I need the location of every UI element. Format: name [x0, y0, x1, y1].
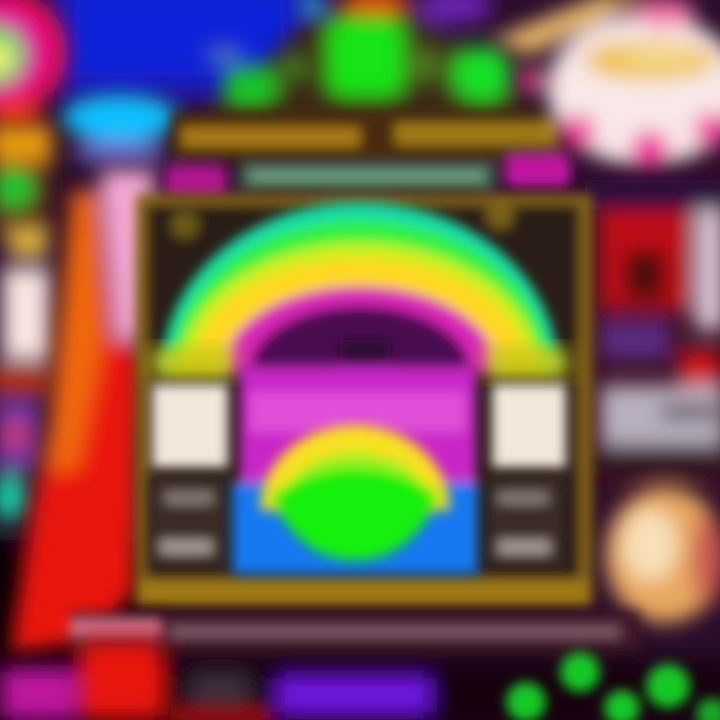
machine cabinet frame — [136, 194, 592, 606]
screen inner rainbow — [260, 425, 450, 560]
marquee sign — [165, 112, 571, 197]
left machine column — [0, 125, 52, 650]
lower arch base yellow bands — [152, 348, 568, 378]
right lower reel — [488, 476, 564, 566]
right side machine — [585, 180, 720, 623]
top-left rainbow ring — [0, 0, 67, 126]
left white reel panel — [152, 384, 228, 468]
bottom buttons — [0, 640, 720, 720]
bottom console text strip — [70, 612, 640, 654]
machine topper — [175, 0, 560, 150]
right white reel panel — [492, 384, 566, 468]
top-right marquee wheel — [490, 0, 720, 169]
central screen — [232, 340, 478, 574]
pink column and red drape — [10, 170, 155, 655]
cyan glow panel — [62, 94, 178, 164]
green chips — [506, 652, 720, 720]
left lower reel — [150, 476, 226, 566]
rainbow arch — [162, 202, 558, 372]
